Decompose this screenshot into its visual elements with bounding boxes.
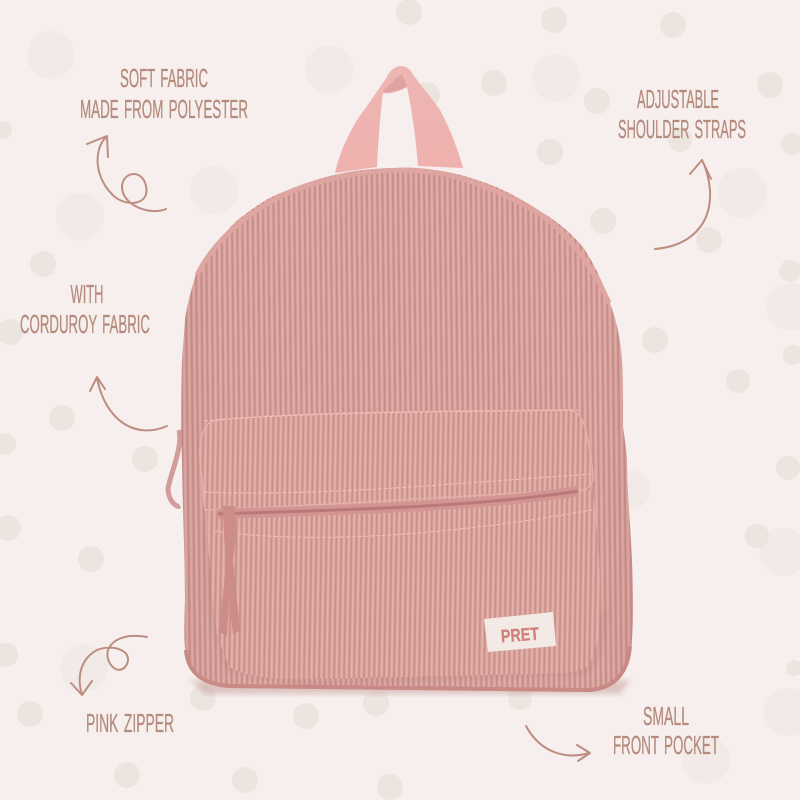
- handle: [335, 66, 463, 173]
- arrow: corduroy: [90, 377, 167, 430]
- heading: soft fabric: SOFT FABRIC: [120, 63, 208, 93]
- heading: soft fabric: MADE FROM POLYESTER: [80, 94, 248, 124]
- label: [484, 612, 556, 652]
- top zip band: [197, 170, 609, 303]
- backpack: [168, 66, 633, 694]
- heading: small front pocket: SMALL: [643, 701, 689, 731]
- heading: small front pocket: [613, 701, 719, 760]
- label: PRET: [500, 624, 540, 646]
- heading: corduroy: CORDUROY FABRIC: [20, 309, 150, 339]
- body: [181, 168, 633, 692]
- side zipper tab: [168, 430, 180, 506]
- heading: corduroy: WITH: [70, 279, 104, 309]
- heading: adjustable straps: [618, 84, 746, 144]
- heading: adjustable straps: ADJUSTABLE: [637, 84, 719, 114]
- flap: [200, 410, 593, 510]
- heading: soft fabric: [80, 63, 248, 124]
- heading: corduroy: [20, 279, 150, 339]
- lower pocket: [207, 490, 601, 679]
- arrow: pink zipper: [71, 636, 147, 695]
- pocket shadow: [205, 520, 604, 683]
- handle inner shade: [383, 74, 407, 93]
- flap shadow: [204, 484, 592, 499]
- heading: pink zipper: PINK ZIPPER: [86, 708, 174, 738]
- stitching: [204, 410, 592, 537]
- arrow: pocket: [526, 726, 590, 761]
- arrow: soft fabric: [87, 136, 166, 211]
- zipper: [218, 491, 578, 514]
- body shadow: [190, 680, 630, 694]
- zipper pull: [219, 506, 240, 636]
- bottom piping: [186, 646, 630, 690]
- body side shading: [181, 168, 633, 692]
- arrow: straps: [655, 160, 711, 249]
